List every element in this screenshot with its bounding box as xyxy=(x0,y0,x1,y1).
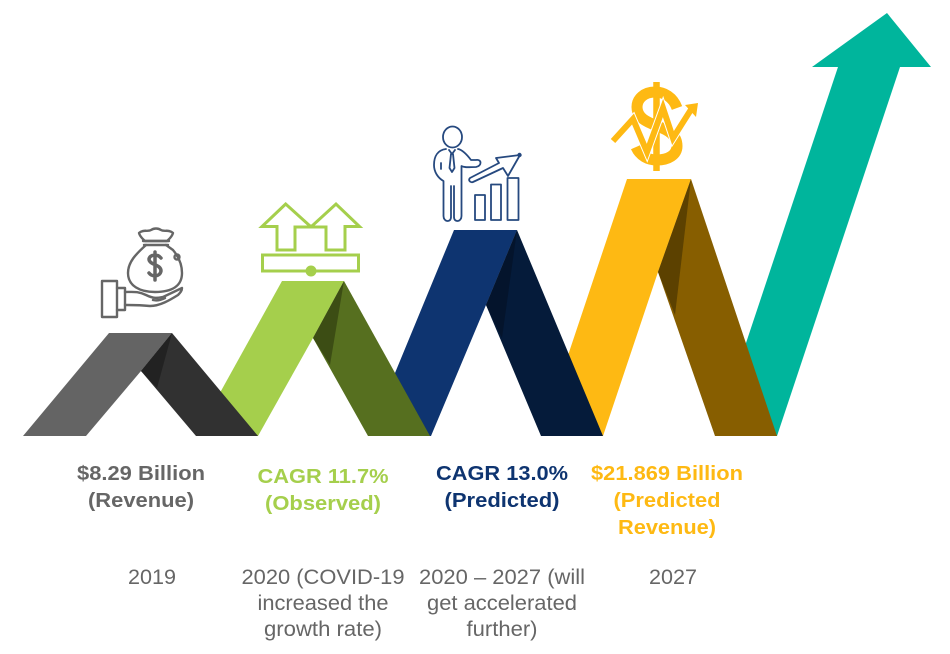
period: 2019: 2019 xyxy=(128,566,176,589)
label: 2020 CAGR: CAGR 11.7% xyxy=(258,465,388,488)
label: 2020 CAGR: (Observed) xyxy=(265,492,381,515)
period: 2020 xyxy=(242,566,404,641)
period: 2020-2027: get accelerated xyxy=(427,592,577,615)
label: 2027 revenue xyxy=(591,462,743,539)
period: 2020: increased the xyxy=(258,592,388,615)
icon: dollar sign with zigzag arrow xyxy=(613,82,698,171)
period: 2020-2027: further) xyxy=(466,618,538,641)
label: 2019 revenue: (Revenue) xyxy=(88,489,194,512)
label: 2020 CAGR xyxy=(258,465,388,515)
icon: two up arrows on a platform xyxy=(262,204,360,276)
growth arrow xyxy=(715,13,931,436)
label: 2020-2027 CAGR xyxy=(436,462,568,512)
icon: money bag on hand xyxy=(102,228,182,317)
period: 2020: 2020 (COVID-19 xyxy=(242,566,404,589)
period: 2020: growth rate) xyxy=(264,618,382,641)
label: 2020-2027 CAGR: CAGR 13.0% xyxy=(436,462,568,485)
icon: presenter with rising bar chart xyxy=(434,126,521,221)
label: 2027 revenue: $21.869 Billion xyxy=(591,462,743,485)
label: 2020-2027 CAGR: (Predicted) xyxy=(444,489,560,512)
label: 2027 revenue: Revenue) xyxy=(618,516,716,539)
label: 2019 revenue: $8.29 Billion xyxy=(77,462,205,485)
period: 2027: 2027 xyxy=(649,566,697,589)
label: 2027 revenue: (Predicted xyxy=(614,489,720,512)
peak: 2019 gray xyxy=(23,333,258,436)
label: 2019 revenue xyxy=(77,462,205,512)
period: 2020-2027: 2020 – 2027 (will xyxy=(419,566,585,589)
peak: 2020-2027 blue xyxy=(369,230,603,436)
peak: 2027 yellow xyxy=(541,179,777,436)
peak: 2020 green xyxy=(196,281,430,436)
period: 2020-2027 xyxy=(419,566,585,641)
